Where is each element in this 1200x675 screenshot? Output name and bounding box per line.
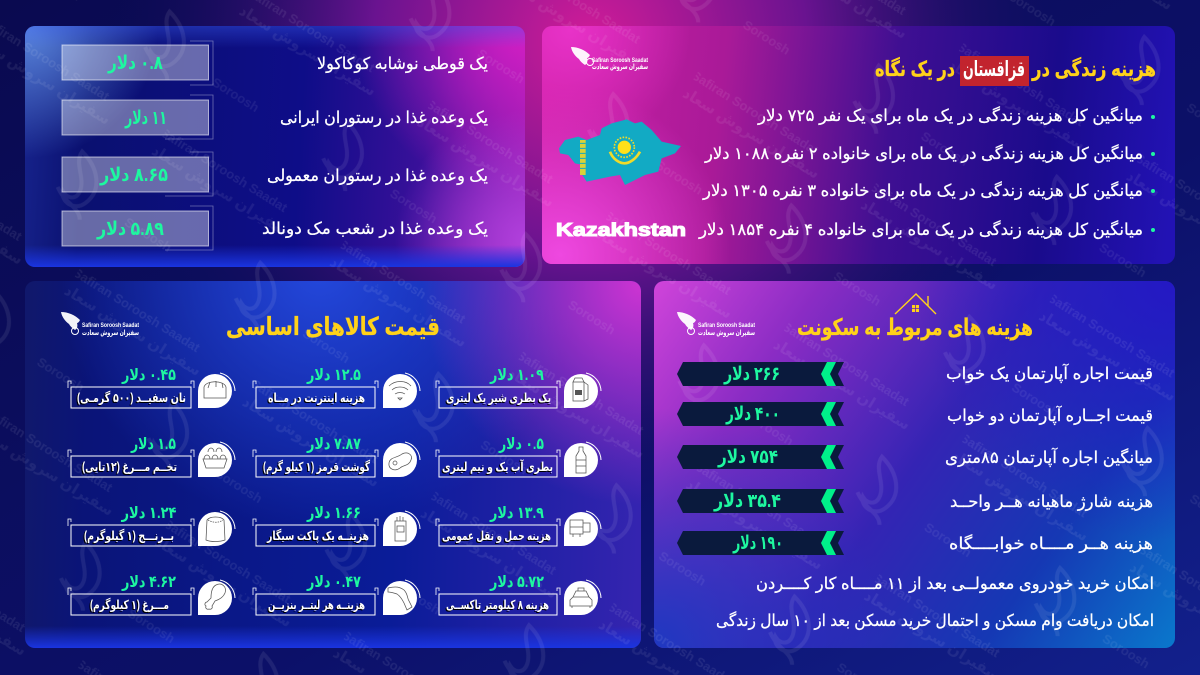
item: internet: ۱۲.۵ دلار [306,367,361,384]
row: ordinary restaurant: ۸.۶۵ دلار [99,165,168,186]
item: chicken [68,574,235,615]
item: milk: یک بطری شیر یک لیتری [446,391,551,405]
item: public transport [436,505,601,546]
row: McDonald's [62,206,488,250]
note: buying a car: امکان خرید خودروی معمولــی بعد از ۱۱ مــــاه کار کــــردن [756,575,1154,594]
item: taxi: هزینه ۸ کیلومتر تاکســی [446,598,549,612]
logo: goods panel [61,312,140,337]
bullet list: میانگین کل هزینه زندگی در یک ماه برای یک نفر ۷۲۵ دلار [757,106,1143,126]
item: taxi [436,574,601,615]
row: one bedroom rent: ۲۶۶ دلار [723,364,780,385]
item: water [436,436,601,477]
row: one bedroom rent [677,362,1153,386]
bullet list: میانگین کل هزینه زندگی در یک ماه برای خانواده ۴ نفره ۱۸۵۴ دلار [698,220,1143,240]
item: bread: ۰.۴۵ دلار [121,367,176,384]
row: 85m apartment: ۷۵۴ دلار [717,447,778,468]
item: water: بطری آب یک و نیم لیتری [442,459,553,474]
note: mortgage: امکان دریافت وام مسکن و احتمال خرید مسکن بعد از ۱۰ سال زندگی [716,611,1154,631]
row: coca cola: ۰.۸ دلار [107,53,163,74]
map of Kazakhstan [559,119,681,185]
item: petrol: ۰.۴۷ دلار [306,574,361,591]
panel: living cost at a glance [542,26,1175,264]
item: red meat [253,436,420,477]
row: McDonald's: یک وعده غذا در شعب مک دونالد [262,220,488,239]
item: eggs: تخــم مـــرغ (۱۲تایی) [82,460,177,474]
heading: goods: قیمت کالاهای اساسی [226,313,440,341]
item: water: ۰.۵ دلار [498,436,544,453]
item: cigarettes: هزینــه یک پاکت سیگار [266,528,369,543]
title: قزاقستان [963,58,1025,81]
item: internet: هزینه اینترنت در مــاه [268,391,365,405]
icon: house [895,294,936,314]
row: two bedroom rent: قیمت اجــاره آپارتمان دو خواب [947,406,1153,426]
item: eggs [68,436,235,477]
item: public transport: هزینه حمل و نقل عمومی [442,529,551,543]
panel: basic goods prices [25,281,641,648]
row: ordinary restaurant: یک وعده غذا در رستوران معمولی [267,167,488,186]
logo: housing panel [677,312,756,337]
item: cigarettes: ۱.۶۶ دلار [306,505,361,522]
panel: housing costs [654,281,1175,648]
row: Iranian restaurant: یک وعده غذا در رستوران ایرانی [280,109,488,128]
row: monthly charge [677,489,1153,513]
row: monthly charge: ۳۵.۴ دلار [713,491,781,512]
item: milk [436,367,601,408]
item: chicken: مـــرغ (۱ کیلوگرم) [90,597,169,613]
logo: housing panel: سفیران سروش سعادت [698,328,755,337]
item: taxi: ۵.۷۲ دلار [489,574,544,591]
item: rice: ۱.۲۴ دلار [121,505,177,522]
bullet list [698,106,1155,240]
logo: top right panel: سفیران سروش سعادت [592,62,648,71]
row: two bedroom rent: ۴۰۰ دلار [725,404,780,425]
logo: top right panel [571,47,649,71]
bullet list: میانگین کل هزینه زندگی در یک ماه برای خانواده ۳ نفره ۱۳۰۵ دلار [702,181,1143,201]
heading: housing: هزینه های مربوط به سکونت [797,314,1033,341]
item: public transport: ۱۳.۹ دلار [489,505,544,522]
item: red meat: گوشت قرمز (۱ کیلو گرم) [263,459,371,475]
panel: dining prices [25,26,525,267]
row: coca cola [62,41,488,85]
row: ordinary restaurant [62,152,488,196]
item: rice [68,505,235,546]
item: milk: ۱.۰۹ دلار [489,367,544,384]
item: petrol: هزینــه هر لیتــر بنزیــن [268,598,365,612]
row: dormitory: ۱۹۰ دلار [732,533,783,554]
item: bread [68,367,235,408]
title: هزینه زندگی در [1031,56,1156,81]
row: two bedroom rent [677,402,1153,426]
item: red meat: ۷.۸۷ دلار [306,436,361,453]
item: petrol [253,574,420,615]
row: dormitory [677,531,1153,555]
item: bread: نان سفیــد (۵۰۰ گرمـی) [77,390,186,405]
row: McDonald's: ۵.۸۹ دلار [96,219,164,240]
row: dormitory: هزینه هــر مــــاه خوابــــگاه [949,534,1153,554]
item: eggs: ۱.۵ دلار [130,436,176,453]
row: 85m apartment [677,445,1153,469]
item: internet [253,367,420,408]
row: Iranian restaurant: ۱۱ دلار [124,108,167,129]
title [875,56,1156,86]
item: rice: بــرنـــج (۱ گیلوگرم) [84,528,174,544]
title: در یک نگاه [875,56,955,81]
row: monthly charge: هزینه شارژ ماهیانه هــر واحــد [950,493,1153,512]
row: 85m apartment: میانگین اجاره آپارتمان ۸۵متری [945,448,1153,468]
logo: top right panel: Safiran Soroosh Saadat [592,57,649,64]
bullet list: میانگین کل هزینه زندگی در یک ماه برای خانواده ۲ نفره ۱۰۸۸ دلار [704,144,1143,164]
item: cigarettes [253,505,420,546]
logo: goods panel: Safiran Soroosh Saadat [82,322,140,329]
item: chicken: ۴.۶۲ دلار [121,574,176,591]
row: Iranian restaurant [62,95,488,139]
row: one bedroom rent: قیمت اجاره آپارتمان یک خواب [946,364,1153,384]
label: Kazakhstan: Kazakhstan [556,220,686,240]
logo: goods panel: سفیران سروش سعادت [82,328,139,337]
logo: housing panel: Safiran Soroosh Saadat [698,322,756,329]
row: coca cola: یک قوطی نوشابه کوکاکولا [317,55,488,74]
